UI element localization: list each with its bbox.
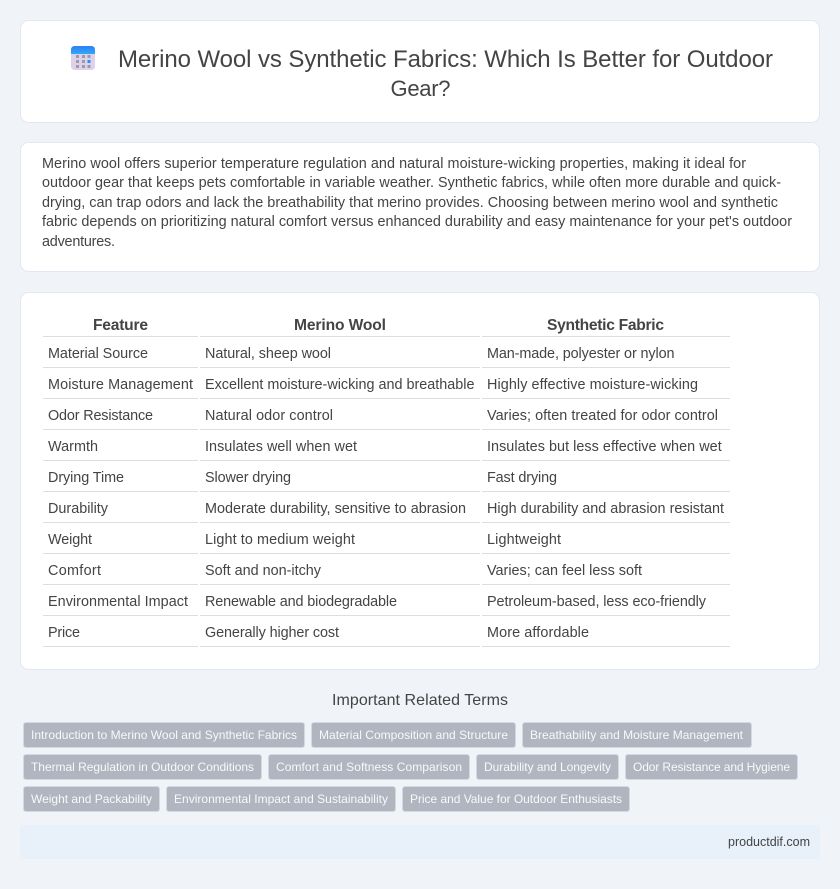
table header: Feature: [93, 317, 148, 334]
table row: environmental impact: Petroleum-based, less eco-friendly: [487, 594, 707, 610]
table row: material source: Material Source: [48, 346, 148, 362]
panel: introduction: [20, 142, 820, 272]
table header: Synthetic Fabric: [547, 317, 664, 334]
table row: odor resistance: Varies; often treated for odor control: [487, 408, 718, 424]
table row: material source: Natural, sheep wool: [205, 346, 331, 362]
text block: introduction: adventures.: [42, 234, 115, 250]
icon: calendar: [71, 46, 95, 70]
table row: warmth: Warmth: [48, 439, 98, 455]
table header: [93, 317, 664, 334]
table row: price: More affordable: [487, 625, 589, 641]
table row: durability: Durability: [48, 501, 109, 517]
panel: header: [20, 20, 820, 122]
table row: moisture management: Highly effective moisture-wicking: [487, 377, 698, 393]
related term tags: Weight and Packability: [31, 792, 152, 806]
table row: material source: [48, 346, 674, 362]
related term tags: Comfort and Softness Comparison: [276, 760, 462, 774]
table row: weight: Lightweight: [487, 532, 561, 548]
related term tags: Breathability and Moisture Management: [530, 728, 744, 742]
table row: comfort: [48, 563, 642, 579]
related term tags: Introduction to Merino Wool and Synthetic Fabrics: [31, 728, 297, 742]
table row: environmental impact: Renewable and biodegradable: [205, 594, 397, 610]
table row: odor resistance: [48, 408, 718, 424]
table row: price: [48, 625, 589, 641]
text block: introduction: drying, can trap odors and lack the breathability that merino provides. Choosing between merino wool and synthetic: [42, 195, 778, 211]
table row: odor resistance: Natural odor control: [205, 408, 333, 424]
text block: introduction: outdoor gear that keeps pets comfortable in variable weather. Synthetic fabrics, while often more durable and quick-: [42, 175, 781, 191]
table row: weight: Light to medium weight: [205, 532, 355, 548]
related term tags: Odor Resistance and Hygiene: [633, 760, 790, 774]
related term tags: Material Composition and Structure: [319, 728, 508, 742]
related term tags: Environmental Impact and Sustainability: [174, 792, 388, 806]
panel: comparison table: [20, 292, 820, 670]
table row: weight: Weight: [48, 532, 92, 548]
related term tags: Price and Value for Outdoor Enthusiasts: [410, 792, 622, 806]
table header: Merino Wool: [294, 317, 386, 334]
table row: warmth: [48, 439, 722, 455]
text block: introduction: fabric depends on prioritizing natural comfort versus enhanced durability and easy maintenance for your pet's outdoor: [42, 214, 792, 230]
table row: durability: Moderate durability, sensitive to abrasion: [205, 501, 466, 517]
text block: introduction: Merino wool offers superior temperature regulation and natural moisture-wicking properties, making it ideal for: [42, 156, 746, 172]
text block: introduction: [42, 156, 792, 250]
title: Gear?: [390, 76, 450, 101]
table row: price: Generally higher cost: [205, 625, 339, 641]
title: Merino Wool vs Synthetic Fabrics: Which Is Better for Outdoor: [118, 46, 773, 73]
table row: comfort: Varies; can feel less soft: [487, 563, 642, 579]
table row: environmental impact: Environmental Impact: [48, 594, 188, 610]
related term tags: [24, 722, 798, 812]
table row: moisture management: Moisture Management: [48, 377, 193, 393]
table row: comfort: Soft and non-itchy: [205, 563, 322, 579]
table row: drying time: Drying Time: [48, 470, 124, 486]
table row: durability: [48, 501, 724, 517]
table row: odor resistance: Odor Resistance: [48, 408, 153, 424]
table row: drying time: Slower drying: [205, 470, 291, 486]
table row: warmth: Insulates but less effective when wet: [487, 439, 722, 455]
related term tags: Thermal Regulation in Outdoor Conditions: [31, 760, 254, 774]
related term tags: Durability and Longevity: [484, 760, 611, 774]
table row: moisture management: Excellent moisture-wicking and breathable: [205, 377, 474, 393]
table row: material source: Man-made, polyester or nylon: [487, 346, 674, 362]
table row: price: Price: [48, 625, 80, 641]
table row: moisture management: [48, 377, 698, 393]
table row: comfort: Comfort: [48, 563, 101, 579]
table row: drying time: Fast drying: [487, 470, 557, 486]
title: [118, 46, 773, 101]
footer: [20, 825, 820, 859]
table row: drying time: [48, 470, 557, 486]
footer: productdif.com: [728, 835, 810, 849]
table row: environmental impact: [48, 594, 707, 610]
table row: durability: High durability and abrasion resistant: [487, 501, 724, 517]
heading: related terms: Important Related Terms: [332, 692, 508, 709]
table row: weight: [48, 532, 561, 548]
table row: warmth: Insulates well when wet: [205, 439, 357, 455]
